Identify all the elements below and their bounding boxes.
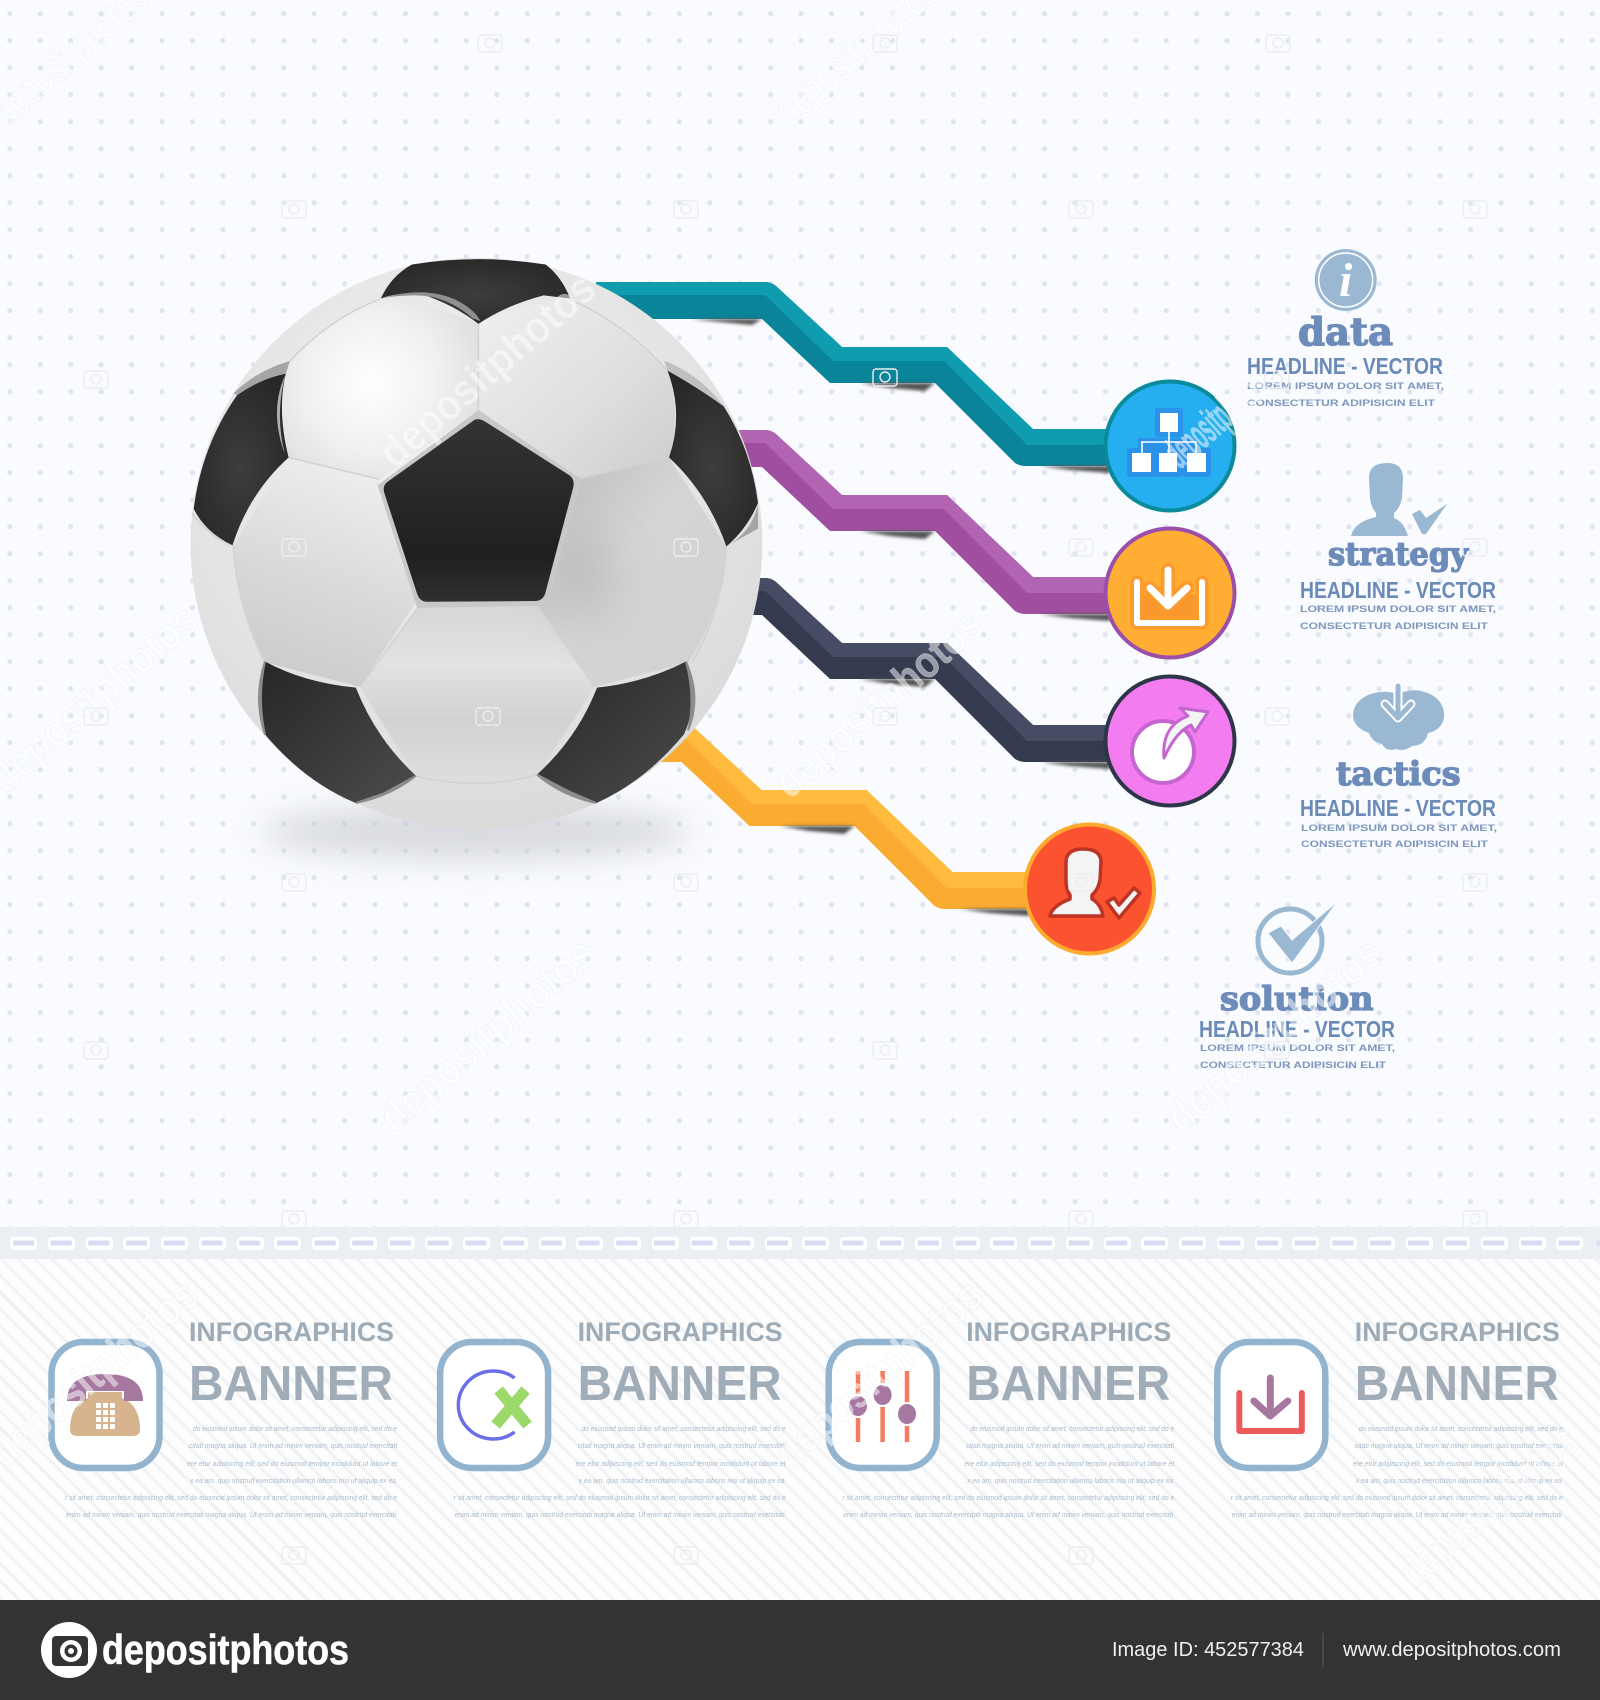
title: INFOGRAPHICS xyxy=(578,1317,783,1347)
banner 4: download xyxy=(1217,1317,1564,1519)
headline: HEADLINE - VECTOR xyxy=(1300,577,1496,603)
watermarks: depositphotos xyxy=(369,928,605,1143)
top pentagon xyxy=(381,259,570,324)
body text: do eiusmod ipsum dolor sit amet, consectetur adipiscing elit, sed do e xyxy=(193,1424,397,1433)
body text: LOREM IPSUM DOLOR SIT AMET, xyxy=(1200,1043,1395,1054)
heading: tactics: tactics xyxy=(1336,754,1460,793)
title: BANNER xyxy=(578,1357,782,1411)
lower striped panel background xyxy=(0,1259,1600,1600)
icon frame xyxy=(52,1342,160,1468)
icon: telephone xyxy=(67,1374,143,1436)
website: www.depositphotos.com xyxy=(1342,1639,1561,1661)
footer bar xyxy=(0,1600,1600,1700)
ribbon: teal connector xyxy=(596,282,1110,473)
icon: person with check xyxy=(1351,463,1447,536)
body text: r sit amet, consectetur adipiscing elit, sed do eiusmod ipsum dolor sit amet, consectetur adipiscing elit, sed do e xyxy=(842,1493,1174,1502)
title: INFOGRAPHICS xyxy=(189,1317,394,1347)
soccer ball xyxy=(191,258,762,830)
icon frame xyxy=(1217,1342,1325,1468)
heading: data: data xyxy=(1298,309,1393,354)
block: tactics xyxy=(1300,686,1497,850)
block: solution xyxy=(1199,901,1395,1071)
body text: CONSECTETUR ADIPISICIN ELIT xyxy=(1200,1060,1386,1071)
body text: CONSECTETUR ADIPISICIN ELIT xyxy=(1247,398,1435,409)
body text: r sit amet, consectetur adipiscing elit, sed do eiusmod ipsum dolor sit amet, consectetur adipiscing elit, sed do e xyxy=(1231,1493,1563,1502)
right pentagon xyxy=(664,361,758,546)
headline: HEADLINE - VECTOR xyxy=(1300,795,1496,821)
body text: x ea am, quis nostrud exercitation ullamco laboris nisi ut aliquip ex ea xyxy=(189,1476,396,1485)
image id: Image ID: 452577384 xyxy=(1112,1639,1304,1661)
body text: enim ad minim veniam, quis nostrud exercitati magna aliqua. Ut enim ad minim veniam, quis nostrud exercitati xyxy=(1232,1510,1562,1519)
block: strategy xyxy=(1300,463,1496,632)
body text: x ea am, quis nostrud exercitation ullamco laboris nisi ut aliquip ex ea xyxy=(578,1476,785,1485)
ball ground shadow xyxy=(261,804,691,860)
body text: ere etur adipiscing elit, sed do eiusmod tempor incididunt ut labore et xyxy=(1353,1459,1564,1468)
icon: sliders xyxy=(848,1371,917,1442)
icon: check circle xyxy=(1258,901,1338,973)
stitched divider band xyxy=(0,1227,1600,1259)
body text: do eiusmod ipsum dolor sit amet, consectetur adipiscing elit, sed do e xyxy=(582,1424,786,1433)
watermarks: depositphotos xyxy=(1154,362,1277,478)
body text: x ea am, quis nostrud exercitation ullamco laboris nisi ut aliquip ex ea xyxy=(1355,1476,1562,1485)
body text: ere etur adipiscing elit, sed do eiusmod tempor incididunt ut labore et xyxy=(187,1459,398,1468)
banner 2: x logo xyxy=(440,1317,786,1519)
body text: ere etur adipiscing elit, sed do eiusmod tempor incididunt ut labore et xyxy=(576,1459,786,1468)
body text: LOREM IPSUM DOLOR SIT AMET, xyxy=(1301,823,1497,834)
badge: pink share xyxy=(1106,676,1234,806)
center pentagon xyxy=(378,410,581,608)
ribbon: purple connector xyxy=(596,430,1110,621)
watermark cameras xyxy=(84,35,1487,1564)
body text: do eiusmod ipsum dolor sit amet, consectetur adipiscing elit, sed do e xyxy=(1359,1424,1563,1433)
badge: red person check xyxy=(1025,824,1154,954)
body text: LOREM IPSUM DOLOR SIT AMET, xyxy=(1247,381,1444,392)
title: BANNER xyxy=(966,1357,1170,1411)
icon: cloud with arrow xyxy=(1353,686,1444,750)
ribbon: navy connector xyxy=(596,578,1110,769)
body text: enim ad minim veniam, quis nostrud exercitati magna aliqua. Ut enim ad minim veniam, quis nostrud exercitati xyxy=(66,1510,396,1519)
icon: org chart xyxy=(1127,408,1211,477)
heading: solution: solution xyxy=(1220,979,1374,1018)
title: BANNER xyxy=(189,1357,393,1411)
headline: HEADLINE - VECTOR xyxy=(1199,1016,1395,1042)
body text: LOREM IPSUM DOLOR SIT AMET, xyxy=(1300,604,1496,615)
logo: wordmark: depositphotos xyxy=(102,1626,349,1673)
body text: citati magna aliqua. Ut enim ad minim veniam, quis nostrud exercitati xyxy=(189,1441,397,1450)
body text: citati magna aliqua. Ut enim ad minim veniam, quis nostrud exercitati xyxy=(1355,1441,1563,1450)
lower-right pentagon xyxy=(537,662,694,803)
banner 1: telephone xyxy=(52,1317,398,1519)
logo: camera mark xyxy=(41,1622,97,1678)
icon: circle with arrow xyxy=(1132,708,1208,783)
title: INFOGRAPHICS xyxy=(966,1317,1171,1347)
icon: info circle xyxy=(1315,249,1377,311)
icon: ring with x xyxy=(458,1371,528,1439)
watermarks: depositphotos xyxy=(1156,928,1392,1143)
icon: info circle: i xyxy=(1339,254,1353,307)
body text: ere etur adipiscing elit, sed do eiusmod tempor incididunt ut labore et xyxy=(964,1459,1175,1468)
headline: HEADLINE - VECTOR xyxy=(1247,353,1443,379)
title: BANNER xyxy=(1355,1357,1559,1411)
icon: download tray xyxy=(1239,1378,1302,1431)
body text: r sit amet, consectetur adipiscing elit, sed do eiusmod ipsum dolor sit amet, consectetur adipiscing elit, sed do e xyxy=(65,1493,397,1502)
background: dotted upper area xyxy=(0,0,1600,1228)
left pentagon xyxy=(194,361,290,545)
heading: strategy: strategy xyxy=(1328,535,1469,573)
lower-left pentagon xyxy=(259,662,416,803)
body text: citati magna aliqua. Ut enim ad minim veniam, quis nostrud exercitati xyxy=(578,1441,786,1450)
icon frame xyxy=(440,1342,548,1468)
badge: blue org chart xyxy=(1106,382,1234,510)
icon frame xyxy=(829,1342,937,1468)
watermarks: depositphotos xyxy=(764,1270,993,1478)
banner 3: sliders xyxy=(829,1317,1175,1519)
body text: do eiusmod ipsum dolor sit amet, consectetur adipiscing elit, sed do e xyxy=(970,1424,1174,1433)
title: INFOGRAPHICS xyxy=(1355,1317,1560,1347)
body text: enim ad minim veniam, quis nostrud exercitati magna aliqua. Ut enim ad minim veniam, quis nostrud exercitati xyxy=(455,1510,785,1519)
block: data xyxy=(1247,249,1444,409)
body text: x ea am, quis nostrud exercitation ullamco laboris nisi ut aliquip ex ea xyxy=(966,1476,1173,1485)
ribbon: yellow connector xyxy=(516,725,1030,916)
body text: r sit amet, consectetur adipiscing elit, sed do eiusmod ipsum dolor sit amet, consectetur adipiscing elit, sed do e xyxy=(454,1493,786,1502)
badge: orange download xyxy=(1106,528,1234,658)
icon: person with check xyxy=(1050,849,1140,918)
body text: CONSECTETUR ADIPISICIN ELIT xyxy=(1300,621,1488,632)
body text: enim ad minim veniam, quis nostrud exercitati magna aliqua. Ut enim ad minim veniam, quis nostrud exercitati xyxy=(843,1510,1173,1519)
watermarks: depositphotos xyxy=(764,600,993,808)
watermarks: depositphotos xyxy=(369,263,605,478)
body text: CONSECTETUR ADIPISICIN ELIT xyxy=(1301,839,1488,850)
body text: citati magna aliqua. Ut enim ad minim veniam, quis nostrud exercitati xyxy=(966,1441,1175,1450)
icon: download tray xyxy=(1137,570,1202,623)
